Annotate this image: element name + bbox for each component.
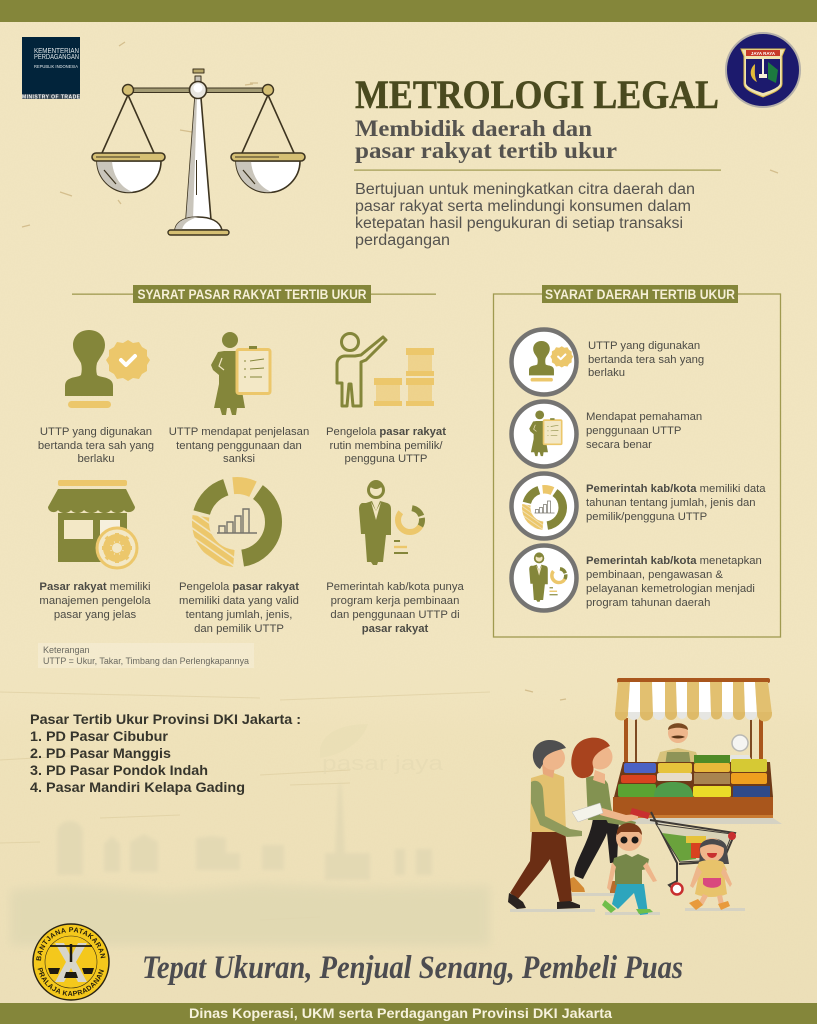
side text 4: pembinaan, pengawasan & [586,569,723,581]
intro text [355,181,695,249]
market list: Pasar Tertib Ukur Provinsi DKI Jakarta : [30,712,301,727]
market list: 1. PD Pasar Cibubur [30,729,169,744]
boy [602,823,657,915]
caption: pengelola: Pengelola pasar rakyat [326,426,446,438]
side text 1: berlaku [588,367,625,379]
side text 4: program tahunan daerah [586,597,710,609]
icon: market store with gear [48,480,137,568]
logo: DKI Jakarta: JAYA RAYA [751,51,776,56]
emblem: Bantjana Patakaran: PRALAJA KAPRADANAN [38,968,104,996]
title: METROLOGI LEGAL [355,72,719,117]
subtitle [355,116,617,163]
pasar jaya watermark [320,724,444,775]
market list [30,712,301,795]
illustration: market stall and family [508,678,782,915]
logo: Kementerian Perdagangan [22,37,81,100]
intro text: pasar rakyat serta melindungi konsumen dalam [355,198,691,215]
caption: manajemen: pasar yang jelas [54,609,136,621]
logo: Kementerian Perdagangan: KEMENTERIAN [34,46,79,55]
side text 4: pelayanan kemetrologian menjadi [586,583,755,595]
panel: syarat daerah [494,285,780,637]
caption: program kerja: pasar rakyat [362,623,429,635]
emblem: Bantjana Patakaran [32,923,110,1001]
logo: Kementerian Perdagangan: MINISTRY OF TRADE [22,94,81,100]
subtitle: Membidik daerah dan [355,116,592,141]
intro text: Bertujuan untuk meningkatkan citra daerah dan [355,181,695,198]
side text 3: tahunan tentang jumlah, jenis dan [586,497,756,509]
heading: syarat daerah: SYARAT DAERAH TERTIB UKUR [545,287,735,302]
icon circle: woman [512,402,576,466]
keterangan note [38,643,254,668]
heading: syarat pasar rakyat: SYARAT PASAR RAKYAT TERTIB UKUR [138,287,367,302]
icon circle: official [512,546,576,610]
caption: data valid: tentang jumlah, jenis, [186,609,292,621]
stall [613,678,782,824]
market list: 2. PD Pasar Manggis [30,746,171,761]
intro text: ketepatan hasil pengukuran di setiap transaksi [355,215,683,232]
caption: manajemen: Pasar rakyat memiliki [39,581,151,593]
icon: stamp [65,330,150,408]
man shopper [508,740,603,909]
side text 3: pemilik/pengguna UTTP [586,511,707,523]
seller [656,723,700,766]
icon: donut chart [200,486,274,558]
woman shopper [566,738,638,893]
faint Jakarta skyline watermark [10,779,490,946]
caption: uttp tera: bertanda tera sah yang [38,440,154,452]
girl [689,838,732,910]
caption: data valid: memiliki data yang valid [179,595,299,607]
icon: official with chart [359,480,422,565]
caption: uttp tera: berlaku [77,453,115,465]
produce crates [614,762,773,797]
logo: DKI Jakarta [726,33,800,107]
caption: pengelola: rutin membina pemilik/ [329,440,443,452]
caption: data valid: Pengelola pasar rakyat [179,581,299,593]
shopping cart [630,808,736,894]
icon circle: stamp [512,330,576,394]
side text 1: bertanda tera sah yang [588,354,704,366]
top bar [0,0,817,22]
caption: penjelasan: tentang penggunaan dan [176,440,302,452]
footer bar: Dinas Koperasi, UKM serta Perdagangan Provinsi DKI Jakarta [189,1005,612,1021]
caption: program kerja: dan penggunaan UTTP di [330,609,460,621]
subtitle: pasar rakyat tertib ukur [355,138,617,163]
market list: 4. Pasar Mandiri Kelapa Gading [30,780,245,795]
caption: data valid: dan pemilik UTTP [194,623,284,635]
tagline: Tepat Ukuran, Penjual Senang, Pembeli Puas [142,950,683,986]
footer bar [0,1003,817,1024]
ground shadows [510,893,745,915]
side text 2: Mendapat pemahaman [586,411,702,423]
keterangan note: UTTP = Ukur, Takar, Timbang dan Perlengkapannya [43,656,249,666]
keterangan note: Keterangan [43,645,90,655]
pasar jaya watermark: pasar jaya [322,753,444,775]
panel: syarat pasar rakyat [38,285,464,635]
emblem: Bantjana Patakaran: BANTJANA PATAKARAN [36,927,106,961]
side text 1: UTTP yang digunakan [588,340,700,352]
side text 2: penggunaan UTTP [586,425,681,437]
side text 3: Pemerintah kab/kota memiliki data [586,483,766,495]
icon: woman with clipboard [211,332,270,415]
caption: uttp tera: UTTP yang digunakan [40,426,152,438]
icon: balance scale [92,69,305,235]
caption: manajemen: manajemen pengelola [39,595,151,607]
caption: penjelasan: sanksi [223,453,255,465]
logo: Kementerian Perdagangan: REPUBLIK INDONESIA [34,64,79,69]
icon: trainer and market stalls [337,334,434,406]
caption: pengelola: pengguna UTTP [345,453,427,465]
caption: program kerja: Pemerintah kab/kota punya [326,581,464,593]
caption: program kerja: program kerja pembinaan [331,595,459,607]
scale on counter [732,735,748,751]
side text 2: secara benar [586,439,652,451]
intro text: perdagangan [355,232,450,249]
icon circle: donut [512,474,576,538]
logo: Kementerian Perdagangan: PERDAGANGAN [34,52,79,61]
caption: penjelasan: UTTP mendapat penjelasan [169,426,309,438]
market list: 3. PD Pasar Pondok Indah [30,763,208,778]
side text 4: Pemerintah kab/kota menetapkan [586,555,762,567]
